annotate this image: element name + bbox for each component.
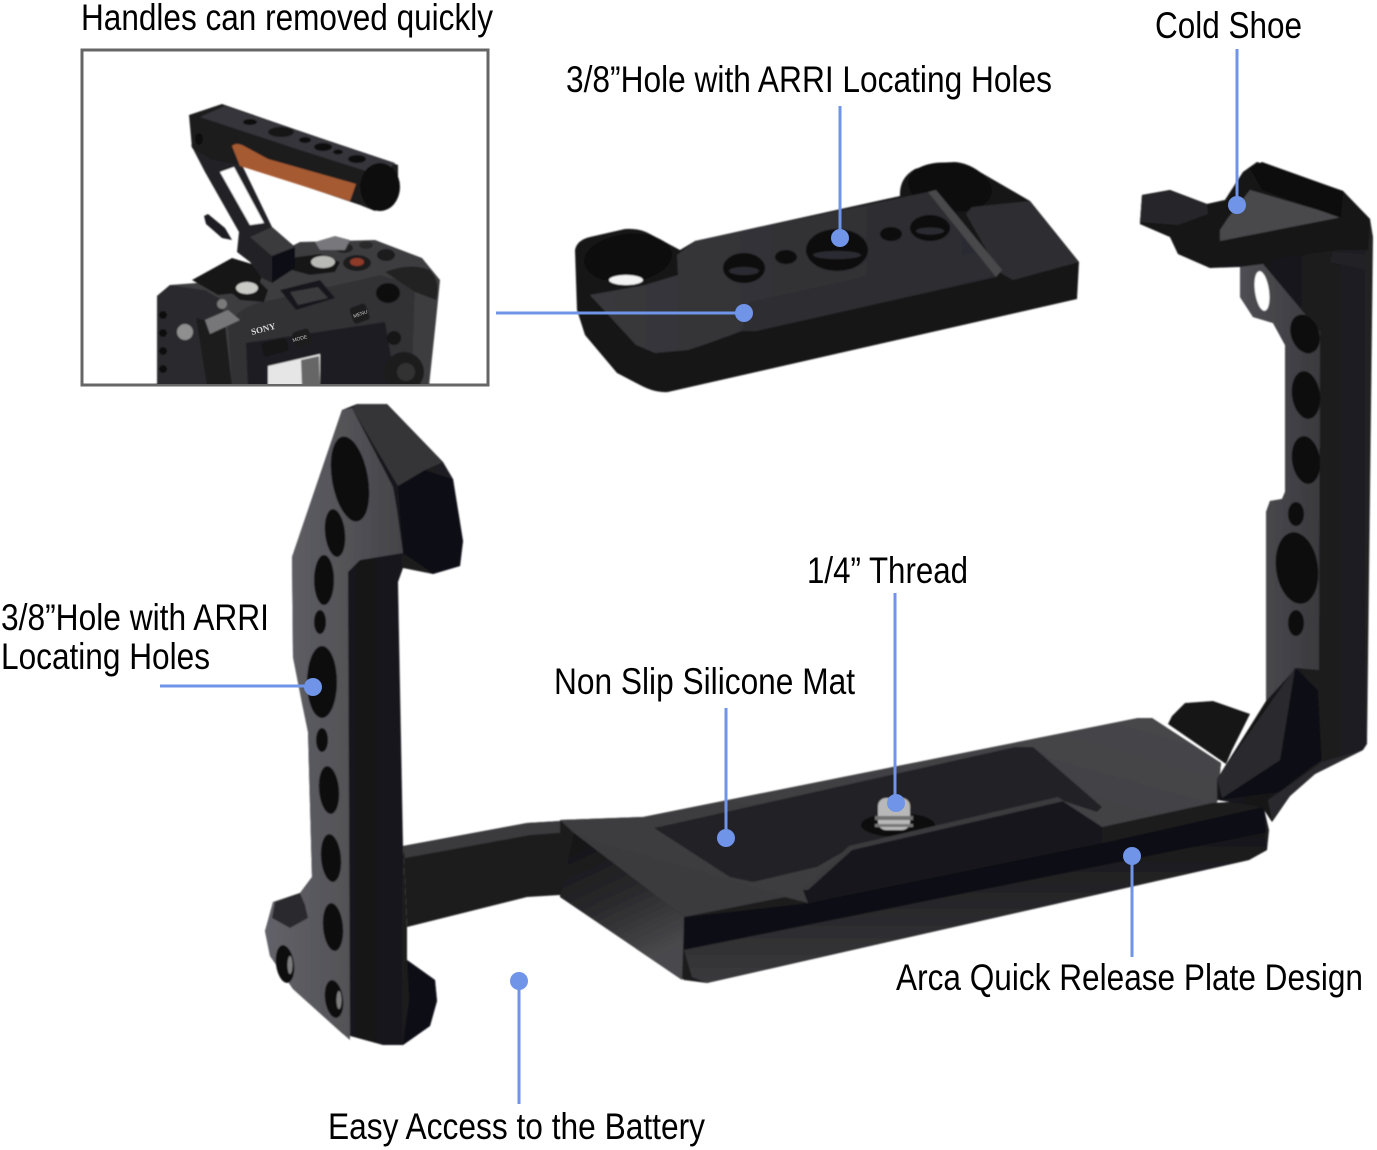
label: battery: Easy Access to the Battery [328,1106,705,1147]
camera body [157,236,440,392]
callout: side hole [160,678,322,696]
port [205,310,240,334]
right upright [1140,162,1373,822]
cold shoe area [280,280,335,310]
label: side holes: Locating Holes [1,636,210,677]
label: cold shoe: Cold Shoe [1155,5,1302,46]
silicone mat [654,747,1102,882]
label: side holes: 3/8”Hole with ARRI [1,597,269,638]
lanyard loop opening [1252,270,1272,312]
mounting holes [582,215,950,286]
left cage holes [159,311,167,319]
inset photo: handle on camera [82,50,488,392]
top dials [343,255,371,271]
plate top surface [560,718,1262,917]
callout: arca plate [1123,847,1141,957]
1/4 thread screw [861,798,935,837]
dial [376,283,400,303]
base bevel [1268,750,1363,820]
camera markings: SONY [250,321,277,337]
label: side holes [1,597,269,677]
callout: cold shoe [1228,49,1246,214]
label: top plate holes: 3/8”Hole with ARRI Locating Holes [566,59,1052,100]
grip face [265,408,403,1040]
rear ear hole [905,157,995,217]
cold shoe [1140,162,1370,270]
gusset [1217,668,1322,800]
callout: top plate hole [831,106,849,247]
top plate accessory [575,157,1079,392]
left grip [265,404,463,1045]
callout: thread [887,593,905,812]
top bevel [352,404,443,486]
handle [189,104,400,283]
rear knob [1168,701,1250,764]
camera markings: MODE [292,334,309,344]
grip holes [273,434,375,1019]
label: thread: 1/4” Thread [807,550,968,591]
callout: inset handle connector [496,304,753,322]
lower side rail [684,833,1267,983]
callout: silicone mat [717,708,735,847]
quick release rail [803,798,1102,903]
left arm [403,821,574,927]
left ramp side [560,833,684,980]
callout: battery access [510,972,528,1104]
label: silicone mat: Non Slip Silicone Mat [554,661,856,702]
camera markings [250,309,369,344]
side holes [1271,310,1325,636]
side face with holes [1240,264,1320,701]
top face [590,192,1000,353]
bottom plate body [560,718,1269,983]
side channel [684,803,1266,950]
camera cage main frame [265,162,1373,1045]
camera markings: MENU [353,309,369,320]
